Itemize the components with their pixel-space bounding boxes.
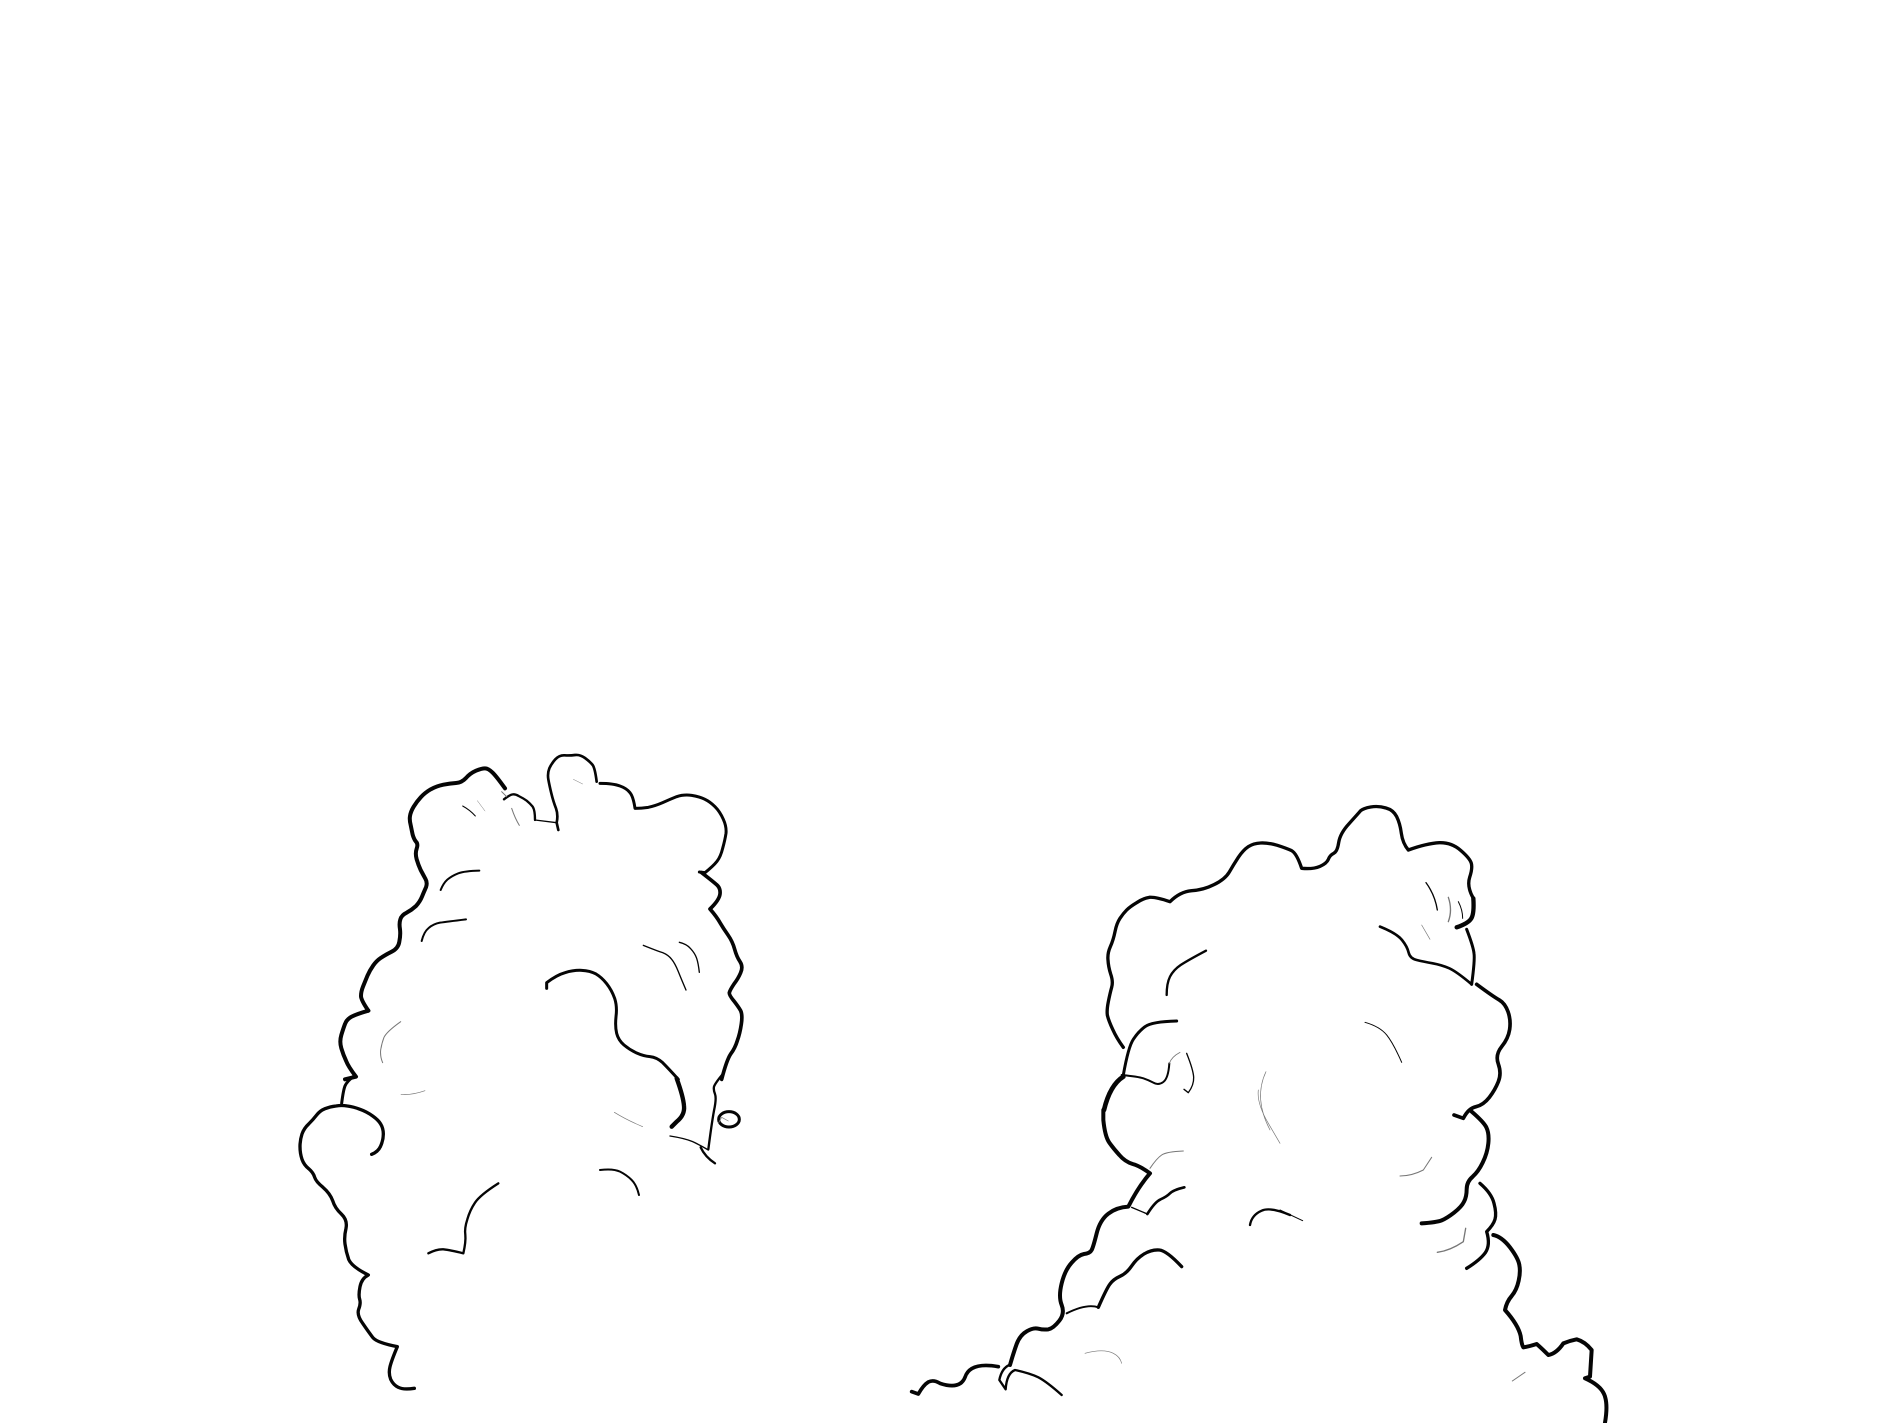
left cloud <box>300 755 742 1389</box>
left cloud: upper outline and inner curls <box>340 755 742 1079</box>
right cloud: lower left outline and base <box>912 1090 1290 1395</box>
right cloud: upper outline and inner curls <box>1104 807 1510 1130</box>
right cloud <box>912 807 1606 1423</box>
left cloud: lower outline, bump and small curl <box>300 1073 739 1389</box>
right cloud: lower right outline and base <box>1280 1112 1606 1423</box>
